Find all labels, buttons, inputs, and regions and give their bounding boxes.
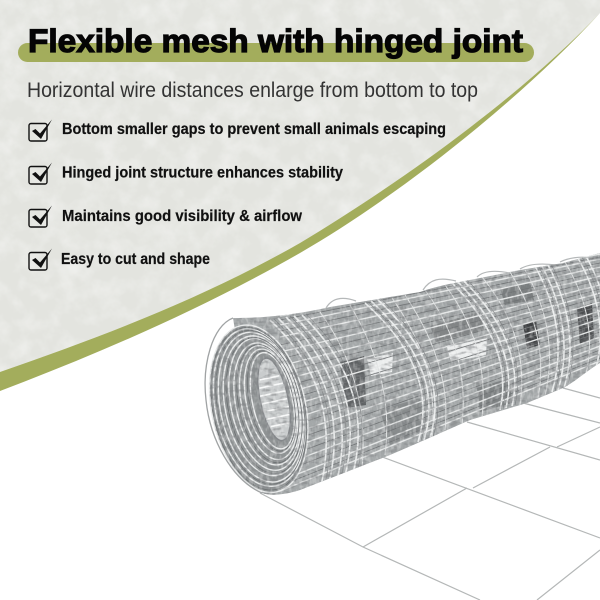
title with olive highlight bbox=[18, 23, 534, 62]
wire roll bbox=[195, 240, 600, 502]
feature 3 bbox=[29, 206, 303, 227]
roll end: coils bbox=[195, 316, 322, 502]
feature 4 bbox=[29, 248, 210, 270]
panel: mottled background with olive curve bbox=[0, 0, 600, 400]
roll body bbox=[233, 253, 600, 495]
title text: Flexible mesh with hinged joint bbox=[28, 23, 523, 59]
icon: checkbox bbox=[29, 120, 52, 141]
horizontal wires bbox=[280, 254, 600, 491]
icon: checkbox bbox=[29, 162, 52, 184]
feature 1: Bottom smaller gaps to prevent small animals escaping bbox=[62, 121, 446, 138]
feature 4: Easy to cut and shape bbox=[61, 251, 210, 268]
fine wire texture over roll bbox=[200, 250, 600, 500]
title highlight pill bbox=[18, 43, 534, 62]
roll hollow centre bbox=[252, 355, 297, 443]
icon: checkbox bbox=[29, 206, 52, 227]
vertical mesh wires bbox=[320, 262, 590, 470]
loose outer wire around roll end bbox=[205, 318, 262, 493]
subtitle: Horizontal wire distances enlarge from bottom to top bbox=[27, 79, 478, 102]
loose wire ends on top of roll bbox=[326, 257, 592, 308]
feature 3: Maintains good visibility & airflow bbox=[62, 208, 303, 225]
icon: checkbox bbox=[29, 248, 52, 270]
feature list bbox=[29, 120, 446, 270]
binding wire bands bbox=[270, 256, 600, 490]
feature 1 bbox=[29, 120, 446, 141]
wire mesh laid flat on ground bbox=[260, 388, 600, 600]
feature 2: Hinged joint structure enhances stability bbox=[62, 164, 343, 182]
feature 2 bbox=[29, 162, 343, 184]
